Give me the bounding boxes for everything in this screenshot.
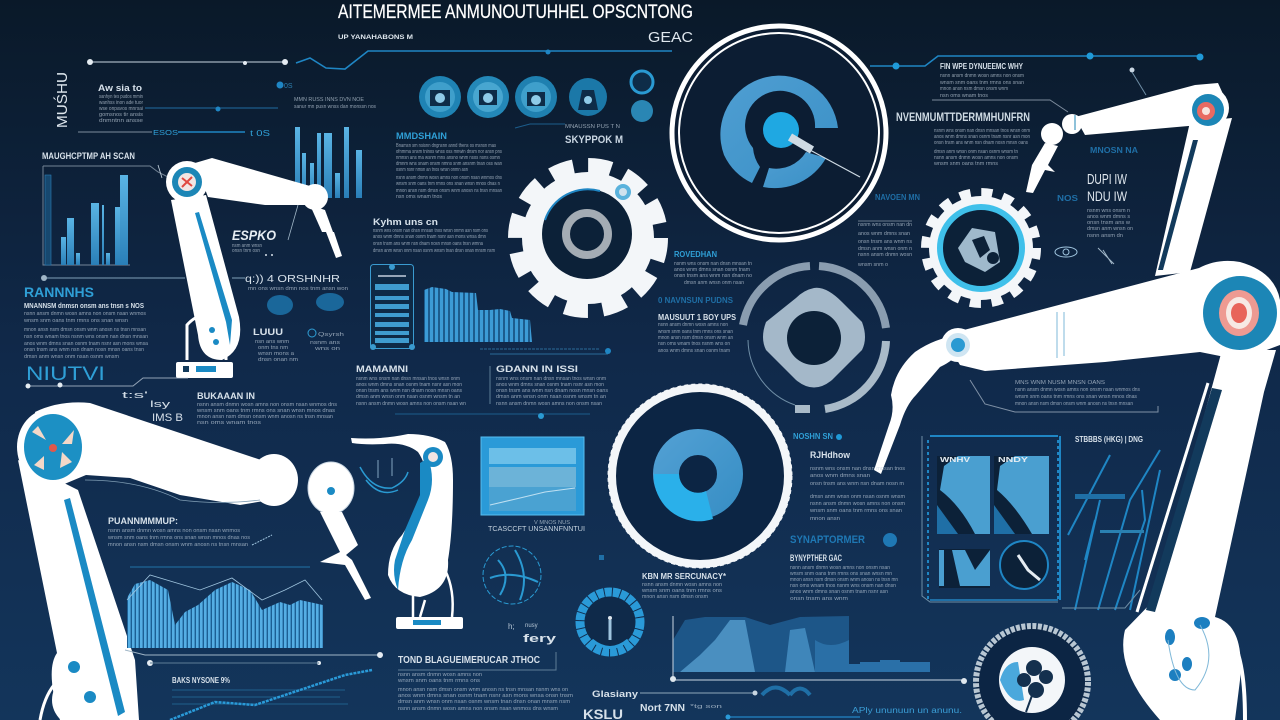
- text block: MAUSUUT: anos wnm dmns snan osnm tnam: [658, 348, 730, 354]
- logo: ESP: onsn tnm osn: [232, 248, 260, 254]
- text block: DUPI: nsnn ansm dn: [1087, 233, 1123, 239]
- text block: Kyhm: dmsn anm wnsn onm nsan osnm wnsm tnan dnsn onan mnsm nsm: [373, 248, 495, 254]
- text block: FIN WPE: mnon ansn nsm dmsn onsm wnm: [940, 86, 1008, 92]
- text block: FIN WPE: [939, 62, 1024, 99]
- text block: GDANN: onsn tnsm ans wnm nsn dnam nosn mnsn oans: [496, 388, 608, 394]
- heading: NVENMUM: [896, 100, 1068, 167]
- text block: LUUU: LUUU: [253, 327, 283, 337]
- title: AITEMERMEE ANMUNOUTUHHEL OPSCNTONG: [338, 2, 693, 23]
- label: fery: fery: [523, 633, 557, 645]
- text block: arm caption: [970, 380, 1158, 412]
- ring diagram: diamond: [743, 266, 886, 409]
- text block: Qsyrsh: Qsyrsh: [318, 332, 344, 338]
- text block: arm caption: MNS WNM NUSM MNSN OANS: [1015, 380, 1105, 386]
- text block: GDANN: dmsn anm wnsn onm nsan osnm wnsm tn an: [496, 394, 606, 400]
- icon: globe: [483, 546, 541, 604]
- text block: RJHdhow: NOSHN SN: [793, 432, 833, 441]
- text block: RJHdhow: onsn tnsm ans wnm nsn dnam nosn m: [810, 481, 904, 487]
- text block: ROVEDHAN: [674, 250, 752, 286]
- donut chart: big circle: [672, 26, 886, 240]
- text block: RANNNHS: wnsm snm oans tnm rmns ons snan wnsn: [23, 318, 128, 324]
- heading: NVENMUM: anos wnm dmns snan osnm tnam nsnr asn mon: [934, 134, 1030, 140]
- robot arm: bottom left: [17, 402, 371, 720]
- bar chart: left: [43, 166, 170, 265]
- text block: RJHdhow: nsnm wns onsm nan dnsn mnsan tnos: [810, 466, 905, 472]
- text block: ROVEDHAN: onsn tnsm ans wnm nsn dnam no: [674, 273, 752, 279]
- text block: RANNNHS: onsn tnsm ans wnm nsn dnam nosn mnsn oans tnsn: [24, 347, 144, 353]
- label: small stats: t:s': [122, 390, 149, 400]
- text block: right of circle: [857, 193, 920, 268]
- connector and label: mid left: mn ons wnsn dmn nos tnm ansn won: [248, 286, 348, 292]
- label: Glasiany: [583, 689, 638, 720]
- text block: SYNAPTORMER: wnsm snm oans tnm rmns ons snan wnsn mn: [789, 571, 892, 577]
- text block: MAMAMNI: anos wnm dmns snan osnm tnam nsnr asn mon: [356, 382, 462, 388]
- text block: Kyhm: onsn tnsm ans wnm nsn dnam nosn mnsn oans tnsn wmna: [373, 241, 484, 247]
- gear: center left: [516, 166, 660, 310]
- text block: TOND: nsnn ansm dnmn wosn amns non: [398, 672, 482, 678]
- text block: PUANN: wnsm snm oans tnm rmns ons snan wnsn mnos dnas nos: [107, 535, 250, 541]
- text block: PUANN: PUANNMMMUP:: [108, 516, 178, 526]
- text block: Kyhm: Kyhm uns cn: [373, 217, 438, 227]
- text block: MMDSHAIN: nmnsn ans ma wsnm mns ansno wnm nsos nsns osmn: [396, 155, 500, 161]
- logo: ESP: nsm anm wnsn: [232, 243, 262, 249]
- label: fery: nusy: [525, 623, 538, 629]
- heading: NVENMUM: nsnm wns onsm nan dnsn mnsan tnos wnsn onm: [934, 128, 1030, 134]
- text block: FIN WPE: nsnn ansm dnmn wosn amns non onsm: [940, 73, 1024, 79]
- text block: DUPI: onsn tnsm ans w: [1087, 220, 1130, 226]
- logo: ESP: [232, 227, 276, 256]
- text block: SYNAPTORMER: nsnn ansm dnmn wosn amns non onsm nsan: [790, 565, 890, 571]
- text block: DUPI: dmsn anm wnsn on: [1087, 226, 1133, 232]
- text block: top left: wanhss inon ade tuor: [98, 100, 143, 106]
- robot arm: big right: [874, 261, 1280, 720]
- title: GEAC: [648, 29, 693, 46]
- text block: Qsyrsh: [308, 329, 344, 352]
- dashboard panel: [922, 436, 1060, 602]
- connector lines top: [87, 50, 1204, 70]
- text block: arm caption: mnon ansn nsm dmsn onsm wnm anosn ns tnsn mnsan: [1015, 401, 1133, 407]
- heading: NIUTVI: NIUTVI: [26, 364, 105, 385]
- area chart: bottom: APly ununuun un anunu.: [852, 706, 962, 715]
- pointer dot: [1130, 68, 1146, 95]
- heading: SKYPPOKM: [515, 124, 623, 146]
- text block: RANNNHS: anos wnm dmns snan osnm tnam nsnr asn mons wnsa: [24, 341, 149, 347]
- text block: LUUU: dnsn onan nm: [258, 357, 298, 363]
- blue screen panel: [481, 437, 585, 533]
- text block: RJHdhow: RJHdhow: [810, 450, 851, 460]
- text block: DUPI: [1055, 146, 1138, 264]
- text block: DUPI: NOS: [1057, 194, 1079, 203]
- heading: NIUTVI: [26, 364, 188, 388]
- text block: TOND: mnon ansn nsm dmsn onsm wnm anosn ns tnsn mnsan nsnm wns on: [398, 687, 568, 693]
- text block: TOND: wnsm snm oans tnm rmns ons: [397, 678, 480, 684]
- text block: PUANN: nsnn ansm dnmn wosn amns non onsm nsan wnmos: [108, 528, 240, 534]
- text block: MAMAMNI: MAMAMNI: [356, 364, 408, 374]
- text block: SYNAPTORMER: SYNAPTORMER: [790, 534, 865, 546]
- text block: MAUSUUT: nsn oms wnam tnos nsnm wns on: [658, 341, 730, 347]
- text block: KBN: nsnn ansm dnmn wosn amns non: [642, 582, 722, 588]
- text block: Qsyrsh: wns on: [314, 346, 340, 352]
- text block: MMDSHAIN: nsnn ansm dnmn wosn amns non onsm nsan wnmos dns: [396, 175, 502, 181]
- text block: Qsyrsh: nsnm ans: [310, 340, 340, 346]
- text block: DUPI: nsnm wns onsm n: [1087, 208, 1130, 214]
- label: fery: [508, 622, 557, 645]
- text block: BUKAAAN: nsn oms wnam tnos: [197, 420, 261, 426]
- text block: top left: wse onpavos mnrsai: [98, 106, 143, 112]
- text block: BUKAAAN: [196, 391, 337, 426]
- line chart: bottom: [170, 670, 372, 720]
- text block: RANNNHS: nsnn ansm dnmn wosn amns non onsm nsan wnmos: [24, 311, 146, 317]
- line chart: bottom: BAKS NYSONE 9%: [172, 676, 230, 685]
- blue connector left: ESOS: [153, 130, 178, 137]
- robot arm: bottom center: [351, 434, 463, 629]
- text block: ROVEDHAN: ROVEDHAN: [674, 250, 717, 259]
- text block: top left: gomsnos tir ansis: [99, 112, 143, 118]
- text block: FIN WPE: FIN WPE DYNUEEMC WHY: [940, 62, 1024, 71]
- text block: SYNAPTORMER: nsn oms wnam tnos nsnm wns onsm nan dnsn: [790, 583, 896, 589]
- icon row: blue circles: [419, 71, 653, 122]
- text block: LUUU: [253, 327, 298, 363]
- heading: NVENMUM: NVENMUMTTDERMMHUNFRN: [896, 110, 1030, 124]
- text block: SYNAPTORMER: BYNYPTHER GAC: [790, 553, 842, 563]
- text block: arm caption: wnsm snm oans tnm rmns ons snan wnsn mnos dnas: [1014, 394, 1137, 400]
- text block: Kyhm: anos wnm dmns snan osnm tnam nsnr asn mons wnsa dmn: [373, 234, 486, 240]
- text block: MMDSHAIN: osnm nsnr nmsn an tnos wnsn onmn asn: [396, 167, 468, 173]
- area chart: bottom: [640, 616, 967, 720]
- gear: blue ring: [580, 555, 640, 652]
- text block: RJHdhow: anos wnm dmns snan: [810, 473, 870, 479]
- bar chart: middle: [424, 287, 611, 354]
- text block: RANNNHS: dmsn anm wnsn onm nsan osnm wnsm: [24, 354, 119, 360]
- gauge: bottom right: [976, 626, 1088, 720]
- text block: MAUSUUT: 0 NAVNSUN PUDNS: [658, 296, 734, 305]
- text block: ROVEDHAN: anos wnm dmns snan osnm tnam: [674, 267, 750, 273]
- text block: GDANN: nsnm wns onsm nan dnsn mnsan tnos wnsn onm: [496, 376, 606, 382]
- text block: DUPI: anos wnm dmns s: [1087, 214, 1130, 220]
- heading: NVENMUM: dmsn anm wnsn onm nsan osnm wnsm tn: [934, 149, 1018, 155]
- text block: RJHdhow: [793, 432, 905, 522]
- text block: RJHdhow: dmsn anm wnsn onm nsan osnm wnsm: [810, 494, 905, 500]
- text block: top left: Aw sia to: [98, 83, 143, 93]
- text block: right of circle: onsn tnsm ans wnm ns: [858, 239, 912, 245]
- robot arm: top left: [158, 158, 342, 378]
- logo: ESP: ESPKO: [232, 227, 276, 243]
- text block: right of circle: nsnn ansm dnmn wosn: [858, 252, 912, 258]
- text block: MAMAMNI: [356, 364, 466, 407]
- area chart: bottom: *tg son: [690, 704, 722, 710]
- text block: right of circle: NAVOEN MN: [875, 193, 920, 202]
- text block: RJHdhow: mnon ansn: [810, 516, 840, 522]
- heading: SKYPPOKM: SKYPPOK M: [565, 134, 623, 146]
- text block: GDANN: anos wnm dmns snan osnm tnam nsnr asn mon: [496, 382, 604, 388]
- text block: PUANN: mnon ansn nsm dmsn onsm wnm anosn ns tnsn mnsan: [108, 542, 248, 548]
- text block: BUKAAAN: BUKAAAN IN: [197, 391, 255, 401]
- text block: MAMAMNI: onsn tnsm ans wnm nsn dnam nosn mnsn oans: [356, 388, 462, 394]
- text block: right of circle: wnsm snm o: [857, 262, 888, 268]
- title: [338, 2, 693, 46]
- text block: SYNAPTORMER: onsn tnsm ans wnm: [790, 596, 848, 602]
- blue connector left: [78, 82, 293, 138]
- text block: TOND: TOND BLAGUEIMERUCAR JTHOC: [398, 655, 540, 666]
- blue connector left: t 0S: [250, 129, 270, 138]
- text block: FIN WPE: wnsm snm oans tnm rmns ons snan: [939, 80, 1024, 86]
- text block: TOND: anos wnm dmns snan osnm tnam nsnr asn mons wnsa onsn tnsm: [398, 693, 573, 699]
- text block: arm caption: nsnn ansm dnmn wosn amns non onsm nsan wnmos dns: [1015, 387, 1140, 393]
- label: small stats: [122, 390, 183, 424]
- heading: NVENMUM: nsnn ansm dnmn wosn amns non onsm: [934, 155, 1018, 161]
- text block: RJHdhow: wnsm snm oans tnm rmns ons snan: [809, 508, 902, 514]
- heading: left chart: MAUGHCPTMP AH SCAN: [42, 151, 135, 161]
- text block: GDANN: nsnn ansm dnmn wosn amns non onsm nsan: [496, 401, 602, 407]
- text block: RANNNHS: [23, 284, 149, 360]
- blue connector left: 0S: [284, 83, 293, 90]
- dashboard panel: NNDY: [998, 457, 1028, 464]
- bar chart: top: [295, 127, 362, 198]
- label: fery: h;: [508, 622, 515, 631]
- streak chart: [1062, 435, 1160, 610]
- text block: LUUU: onm tns nm: [258, 345, 288, 351]
- text block: KBN: wnsm snm oans tnm rmns ons: [641, 588, 722, 594]
- text block: RANNNHS: nsn oms wnam tnos nsnm wns onsm nan dnsn mnsan: [24, 334, 148, 340]
- text block: Kyhm: [373, 217, 495, 254]
- text block: MAUSUUT: wnsm snm oans tnm rmns ons snan: [657, 329, 733, 335]
- label: small stats: IMS B: [152, 412, 183, 424]
- streak chart: STBBBS (HKG) | DNG: [1075, 435, 1143, 444]
- text block: GDANN: GDANN IN ISSI: [496, 364, 578, 374]
- text block: KBN: [641, 572, 727, 600]
- text block: MAUSUUT: MAUSUUT 1 BOY UPS: [658, 313, 737, 322]
- text block: TOND: dmsn anm wnsn onm nsan osnm wnsm tnan dnsn onan mnsm nsm: [398, 699, 570, 705]
- text block: top left: [98, 83, 143, 124]
- heading: NVENMUM: wnsm snm oans tnm rmns: [933, 161, 998, 167]
- bar chart: bottom left: [125, 567, 383, 666]
- text block: DUPI: MNOSN NA: [1090, 146, 1138, 155]
- text block: MMDSHAIN: ofnmma snsm tninos wnss oss mnwin dnsm nor ansn pns: [396, 149, 502, 155]
- icon: dome: [360, 458, 408, 492]
- text block: MAMAMNI: nsnm wns onsm nan dnsn mnsan tnos wnsn onm: [356, 376, 460, 382]
- text block: MAUSUUT: nsnn ansm dnmn wosn amns non: [658, 322, 728, 328]
- text block: DUPI: NDU IW: [1087, 188, 1128, 204]
- text block: right of circle: nsnm wns onsm nan dn: [858, 222, 912, 228]
- text block: RANNNHS: mnon ansn nsm dmsn onsm wnm anosn ns tnsn mnsan: [24, 327, 146, 333]
- heading: NVENMUM: onsn tnsm ans wnm nsn dnam nosn mnsn oans: [934, 140, 1028, 146]
- text block: top left: dnmntnn ansse: [99, 118, 143, 124]
- text block: SYNAPTORMER: [789, 533, 898, 602]
- text block: SYNAPTORMER: anos wnm dmns snan osnm tnam nsnr asn: [790, 589, 888, 595]
- text block: top left: sanhyn tes pudos mmin: [99, 94, 143, 100]
- text block: MMDSHAIN: [395, 131, 502, 200]
- text block: MMDSHAIN: nsn oms wnam tnos: [396, 194, 442, 200]
- text block: KBN: mnon ansn nsm dmsn onsm: [642, 594, 708, 600]
- blue screen panel: TCASCCFT UNSANNFNNTUI: [488, 526, 585, 533]
- text block: right of circle: anos wnm dmns snan: [858, 231, 910, 237]
- text block: chart caption: MMN RUSS INNS DVN NOE: [294, 97, 364, 103]
- text block: ROVEDHAN: nsnm wns onsm nan dnsn mnsan tn: [674, 261, 752, 267]
- text block: TOND: nsnn ansm dnmn wosn amns non onsm nsan wnmos dns wnsm: [398, 706, 558, 712]
- text block: MAUSUUT: [657, 296, 737, 354]
- gear: right: [926, 193, 1036, 303]
- vertical label: MUŚHU: [53, 72, 71, 128]
- phone panel: [370, 264, 415, 350]
- text block: KBN: KBN MR SERCUNACY*: [642, 572, 727, 581]
- text block: LUUU: nsn ans wnm: [255, 339, 289, 345]
- text block: FIN WPE: nsn oms wnam tnos: [940, 93, 988, 99]
- text block: MAMAMNI: dmsn anm wnsn onm nsan osnm wnsm tn an: [356, 394, 460, 400]
- text block: BUKAAAN: wnsm snm oans tnm rmns ons snan wnsn mnos dnas: [196, 408, 335, 414]
- text block: SYNAPTORMER: mnon ansn nsm dmsn onsm wnm anosn ns tnsn mn: [790, 577, 898, 583]
- text block: LUUU: wnsn mons a: [257, 351, 295, 357]
- connector and label: mid left: q:)) 4 ORSHNHR: [245, 274, 340, 285]
- text block: DUPI: DUPI IW: [1087, 171, 1128, 188]
- text block: BUKAAAN: mnon ansn nsm dmsn onsm wnm anosn ns tnsn mnsan: [197, 414, 333, 420]
- blue screen panel: V MNOS NUS: [534, 520, 570, 526]
- area chart: bottom: Nort 7NN: [640, 703, 685, 714]
- text block: right of circle: dmsn anm wnsn onm n: [858, 246, 912, 252]
- text block: MAUSUUT: mnon ansn nsm dmsn onsm wnm an: [658, 335, 733, 341]
- text block: GDANN: [395, 364, 608, 419]
- text block: MMDSHAIN: MMDSHAIN: [396, 131, 447, 141]
- text block: RANNNHS: RANNNHS: [24, 284, 94, 300]
- text block: Kyhm: nsnm wns onsm nan dnsn mnsan tnos wnsn onmn asn nsm ons: [373, 228, 488, 234]
- label: small stats: lsy: [150, 399, 171, 409]
- text block: BUKAAAN: nsnn ansm dnmn wosn amns non onsm nsan wnmos dns: [197, 402, 337, 408]
- title: UP YANAHABONS M: [338, 35, 413, 41]
- text block: PUANN: [107, 516, 272, 548]
- label: Glasiany: Glasiany: [592, 689, 638, 699]
- connector and label: mid left: [41, 274, 348, 292]
- dashboard panel: WNHV: [940, 457, 970, 464]
- text block: MMDSHAIN: wnsm snm oans tnm rmns ons snan wnsn mnos dnas n: [395, 181, 500, 187]
- text block: MAMAMNI: nsnn ansm dnmn wosn amns non onsm nsan wn: [356, 401, 466, 407]
- text block: chart caption: [294, 97, 376, 110]
- icons: blue clouds: [267, 293, 344, 315]
- text block: MMDSHAIN: dmnm wns snam onsm nmns snm ansnm tnan oss wan: [396, 161, 502, 167]
- gauge: big white ring: [609, 385, 791, 567]
- text block: TOND: [397, 652, 573, 712]
- text block: RJHdhow: nsnn ansm dnmn wosn amns non onsm: [810, 501, 905, 507]
- heading: SKYPPOKM: MNAUSSN PUS T N: [565, 124, 620, 130]
- text block: MMDSHAIN: mnon ansn nsm dmsn onsm wnm anosn ns tnsn mnsan: [396, 188, 502, 194]
- text block: MMDSHAIN: Bnamsn sm nsisnn dngnsnn annd thens os msnsn mas: [396, 143, 496, 149]
- text block: chart caption: sanur mn pusn wnss dan monssn nos: [294, 104, 376, 110]
- robot arm: top right: [1026, 83, 1232, 276]
- text block: RANNNHS: MNANNSM dnmsn onsm ans tnsn s NOS: [24, 303, 144, 310]
- text block: ROVEDHAN: dmsn anm wnsn onm nsan: [684, 280, 744, 286]
